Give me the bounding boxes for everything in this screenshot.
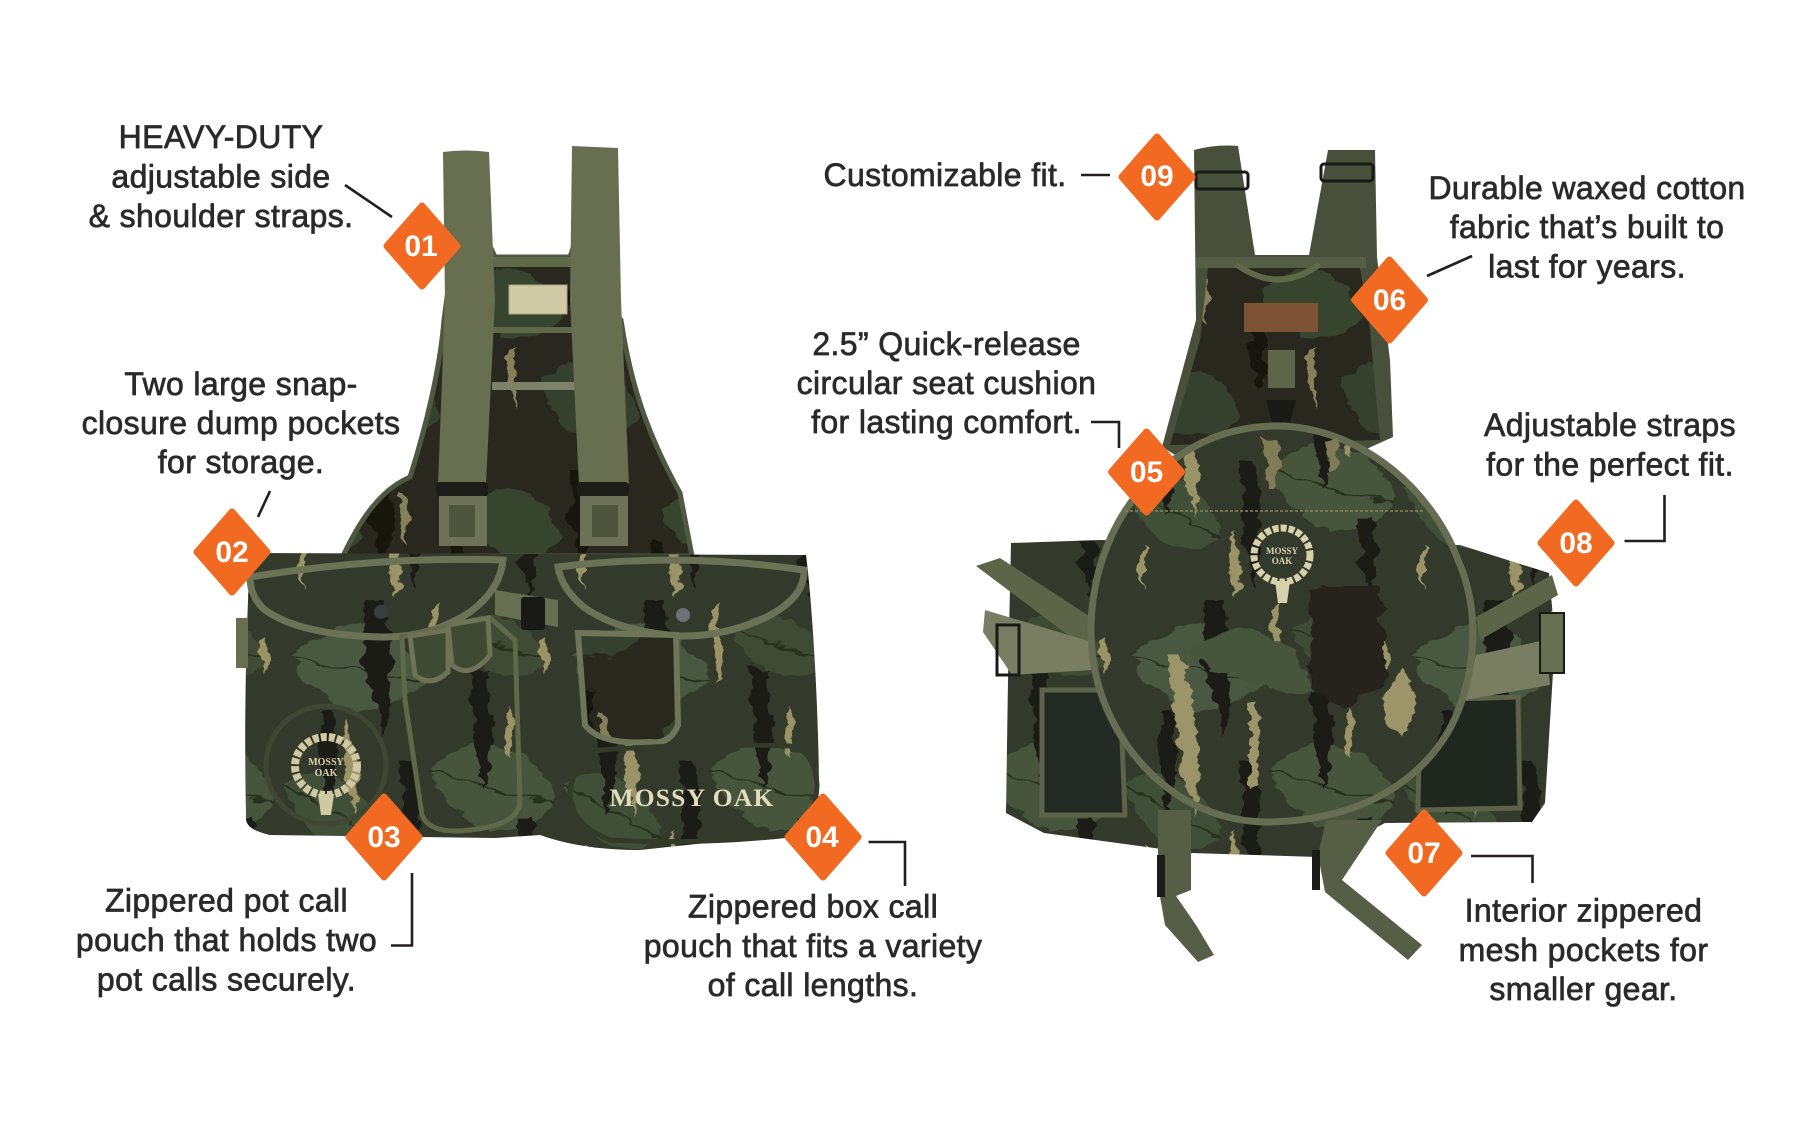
badge 02	[197, 512, 267, 592]
text: waxed cotton	[1428, 170, 1746, 284]
text: seat cushion: circular seat cushion	[797, 365, 1096, 401]
badge 03	[349, 797, 419, 877]
leader lines	[258, 175, 1664, 946]
text: straps	[89, 119, 353, 234]
text: mesh pockets	[1459, 892, 1708, 1007]
text: pot call pouch	[76, 882, 377, 998]
cushion tree logo: MOSSY	[1266, 546, 1298, 556]
text: straps: HEAVY-DUTY	[119, 119, 323, 155]
text: pot call pouch: pot calls securely.	[97, 962, 356, 998]
harness band	[1196, 257, 1366, 268]
side tab	[236, 618, 248, 668]
badge 05: 05	[1130, 456, 1163, 489]
text: adjustable straps: Adjustable straps	[1484, 407, 1736, 443]
text: mesh pockets: smaller gear.	[1489, 971, 1678, 1007]
badge 06: 06	[1373, 284, 1406, 317]
text: box call pouch: of call lengths.	[708, 967, 918, 1003]
text: box call pouch: pouch that fits a variety	[644, 928, 982, 964]
front vest	[236, 146, 819, 850]
text: box call pouch: Zippered box call	[688, 888, 938, 924]
back panel and wings	[343, 185, 692, 556]
text: mesh pockets: mesh pockets for	[1459, 932, 1708, 968]
strap buckles and tabs	[436, 482, 629, 546]
oval pouch	[266, 706, 386, 824]
back vest	[976, 146, 1564, 962]
text: straps: adjustable side	[111, 158, 331, 194]
cushion pocket seam	[1125, 510, 1425, 512]
center pouch	[402, 618, 520, 831]
badge 09: 09	[1140, 160, 1174, 193]
badge 03: 03	[367, 821, 401, 854]
badge 01: 01	[404, 230, 438, 263]
text: seat cushion	[797, 326, 1096, 440]
harness camo panel	[1170, 268, 1380, 445]
right flap	[558, 560, 804, 636]
left mesh pocket	[1042, 690, 1125, 815]
leather patch	[1244, 303, 1318, 332]
badge 08	[1541, 503, 1611, 583]
text: box call pouch	[644, 888, 982, 1003]
cushion tree logo	[1254, 528, 1310, 603]
bottom straps	[1157, 810, 1422, 962]
text: mesh pockets: Interior zippered	[1465, 892, 1702, 928]
upper harness	[1162, 146, 1393, 470]
box call pouch: MOSSY OAK	[610, 783, 774, 812]
strap sliders	[1196, 164, 1373, 189]
main bag	[245, 553, 819, 850]
text: adjustable straps	[1484, 407, 1736, 482]
text: pot call pouch: Zippered pot call	[105, 882, 348, 918]
waist buckle	[495, 590, 558, 630]
snaps	[374, 605, 690, 666]
chest clip	[1266, 350, 1296, 422]
text: seat cushion: 2.5” Quick-release	[812, 326, 1081, 362]
badge 04: 04	[805, 821, 839, 854]
badge 08: 08	[1559, 527, 1593, 560]
cream label	[509, 285, 567, 314]
right straps and buckles	[1465, 575, 1564, 700]
cushion camo details	[1166, 437, 1416, 787]
badge 05	[1112, 432, 1182, 512]
left flap	[250, 559, 503, 637]
text: dump pockets: closure dump pockets	[82, 405, 400, 441]
seat cushion	[1091, 426, 1473, 822]
text: customizable fit: Customizable fit.	[824, 157, 1066, 193]
badge 07	[1389, 813, 1459, 893]
right mesh pocket	[1418, 697, 1520, 810]
right pouch	[578, 633, 678, 742]
badge 07: 07	[1407, 837, 1441, 870]
text: seat cushion: for lasting comfort.	[811, 404, 1082, 440]
right shoulder strap	[570, 146, 629, 484]
badge 01	[387, 206, 457, 286]
upper bands	[492, 257, 578, 390]
text: dump pockets: for storage.	[158, 444, 324, 480]
left shoulder strap	[438, 150, 495, 484]
box call pouch	[570, 745, 817, 842]
cushion tree logo: OAK	[1272, 556, 1292, 566]
tree logo: MOSSY	[308, 757, 345, 768]
tree logo: OAK	[315, 768, 338, 779]
text: waxed cotton: last for years.	[1488, 248, 1686, 284]
text: pot call pouch: pouch that holds two	[76, 922, 377, 958]
text: dump pockets: Two large snap-	[124, 366, 358, 402]
badge 04	[788, 797, 858, 877]
tree logo	[295, 737, 357, 815]
badge 09	[1122, 137, 1192, 217]
harness loop	[1236, 264, 1320, 280]
text: adjustable straps: for the perfect fit.	[1486, 446, 1734, 482]
badge 02: 02	[215, 536, 249, 569]
side bag body	[1006, 540, 1555, 857]
badge 06	[1354, 260, 1424, 340]
text: dump pockets	[82, 366, 400, 480]
text: straps: & shoulder straps.	[89, 198, 353, 234]
text: waxed cotton: Durable waxed cotton	[1428, 170, 1746, 206]
text: waxed cotton: fabric that’s built to	[1450, 209, 1724, 245]
snap tabs	[410, 618, 490, 681]
left straps and buckles	[976, 558, 1095, 675]
